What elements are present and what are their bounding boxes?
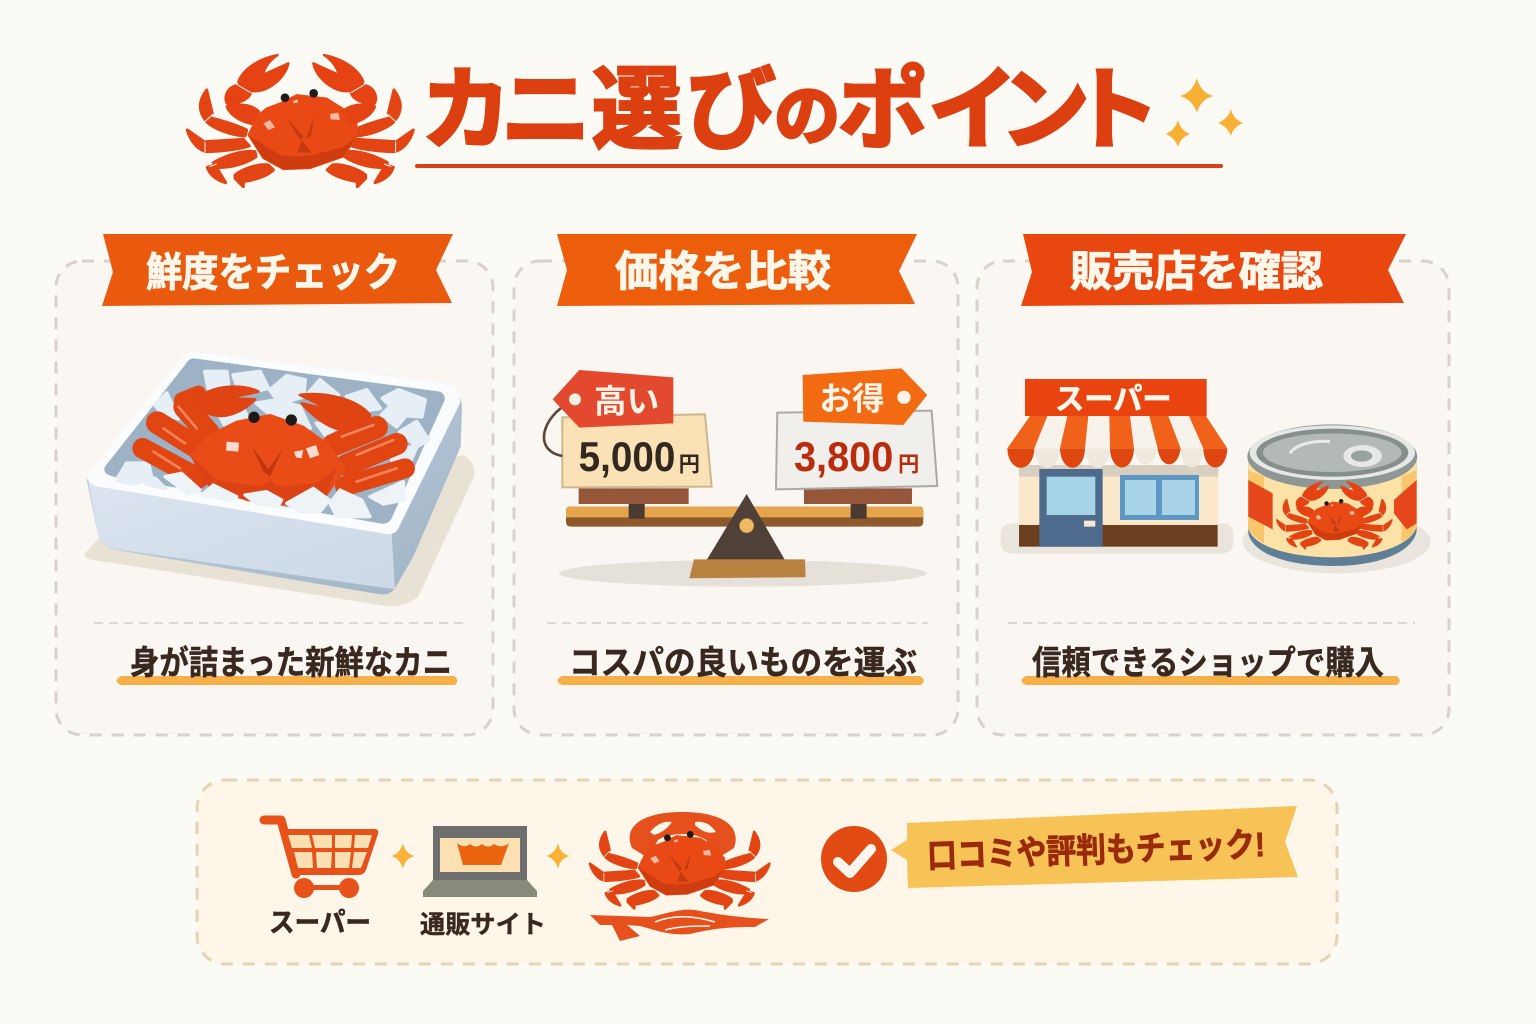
section divider — [547, 622, 928, 624]
caption: freshness: 身が詰まった新鮮なカニ — [130, 644, 452, 681]
icon: laptop — [423, 826, 537, 897]
banner: shops: 販売店を確認 — [1070, 248, 1323, 295]
price card: 5,000 yen: 円 — [679, 453, 700, 477]
caption: price: コスパの良いものを運ぶ — [569, 644, 917, 681]
caption highlight — [558, 676, 924, 685]
panel: price — [514, 234, 958, 735]
sparkles next to title — [1166, 78, 1243, 147]
caption highlight — [1022, 676, 1400, 685]
banner: shops — [1021, 234, 1406, 306]
banner: freshness: 鮮度をチェック — [146, 251, 400, 295]
price tag: good deal: お得 — [819, 380, 885, 417]
panel: freshness — [56, 234, 493, 735]
price tag: expensive: 高い — [594, 383, 659, 420]
price card: 3,800 yen — [776, 411, 937, 489]
title: カニ選び — [421, 61, 776, 161]
title: の — [774, 79, 840, 153]
icon: check mark — [821, 826, 887, 892]
title: イント — [928, 61, 1160, 161]
callout ribbon — [891, 806, 1298, 888]
title underline — [417, 164, 1221, 168]
icon: sparkle — [391, 843, 415, 869]
illustration: supermarket — [1001, 379, 1233, 553]
title crab illustration — [187, 55, 413, 187]
price card: 5,000 yen — [562, 414, 712, 487]
icon: shopping cart — [264, 820, 378, 898]
icon: sparkle — [546, 843, 570, 869]
price card: 3,800 yen: 3,800 — [794, 433, 893, 480]
banner: price: 価格を比較 — [615, 248, 831, 295]
panel: shops — [977, 234, 1449, 735]
banner: price — [557, 234, 917, 306]
price card: 5,000 yen: 5,000 — [579, 433, 675, 480]
panel: where to buy — [197, 780, 1337, 964]
illustration: crab in ice box — [85, 352, 474, 606]
illustration: crab — [590, 812, 770, 941]
label: supermarket: スーパー — [269, 908, 371, 938]
callout ribbon: 口コミや評判もチェック! — [926, 826, 1266, 876]
label: online shop: 通販サイト — [420, 911, 546, 939]
price tag: good deal — [803, 368, 927, 425]
banner: freshness — [102, 234, 453, 306]
caption highlight — [116, 676, 457, 685]
section divider — [1008, 622, 1415, 624]
illustration: supermarket: スーパー — [1055, 383, 1172, 416]
price card: 3,800 yen: 円 — [898, 453, 919, 477]
illustration: canned crab — [1243, 424, 1431, 573]
illustration: price balance — [544, 368, 937, 587]
price tag: expensive — [544, 370, 673, 456]
title: ポ — [838, 61, 928, 161]
caption: shops: 信頼できるショップで購入 — [1032, 644, 1384, 681]
section divider — [94, 622, 466, 624]
